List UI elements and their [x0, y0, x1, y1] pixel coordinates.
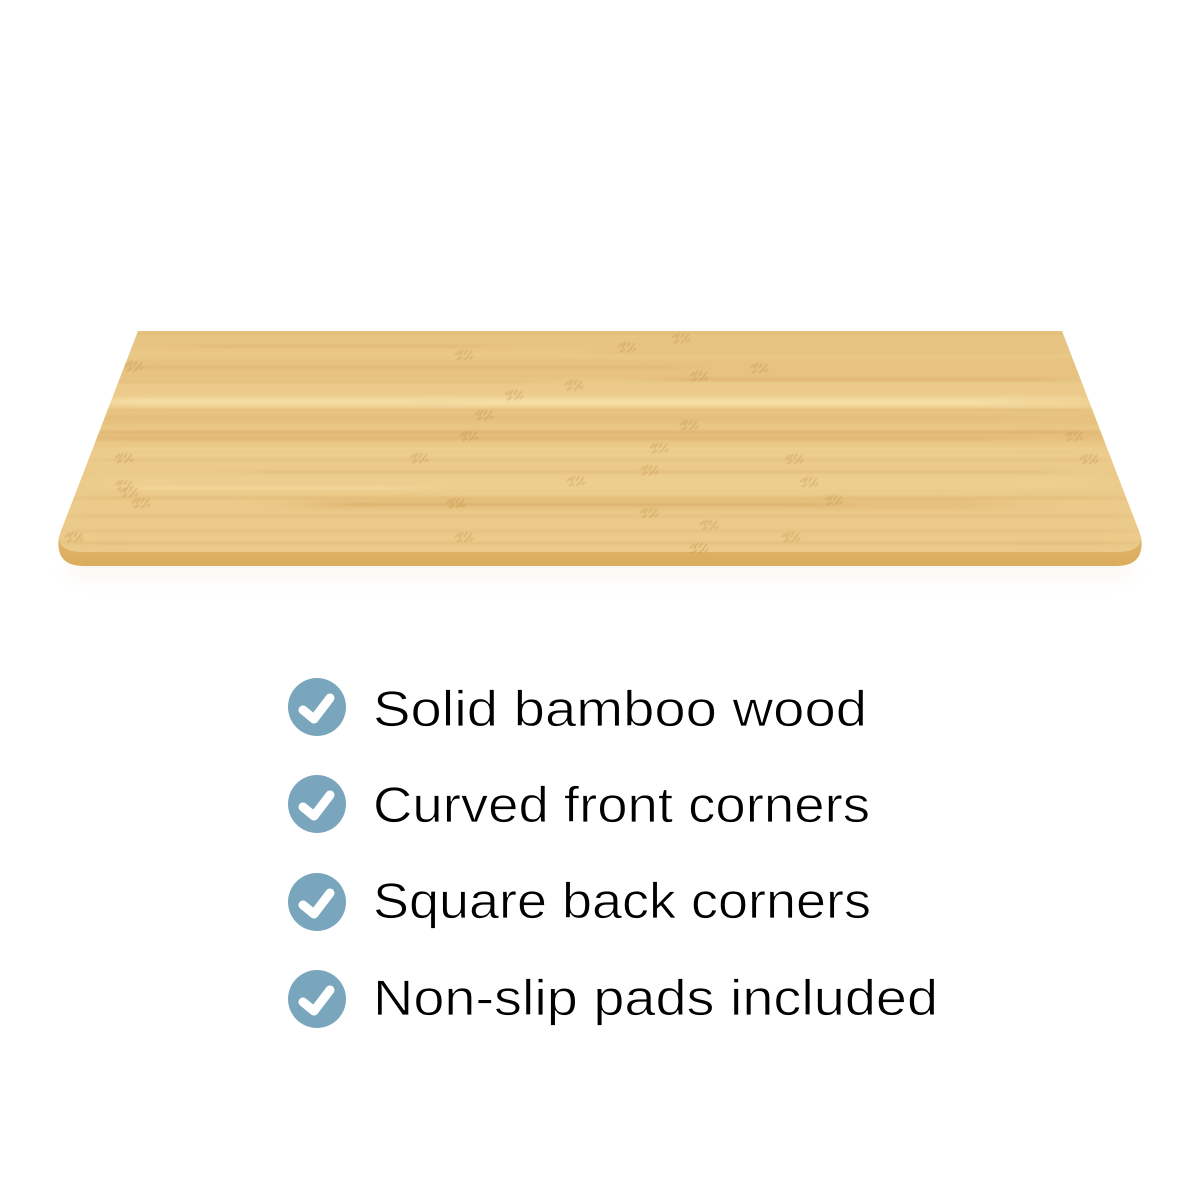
- board front edge: [58, 531, 1142, 566]
- bamboo desktop board: [58, 331, 1142, 576]
- bamboo knots: [65, 333, 1098, 542]
- board top surface with grain: [60, 331, 1140, 552]
- feature list: [288, 678, 938, 1028]
- label: Curved front corners: [373, 777, 870, 833]
- label: Non-slip pads included: [373, 970, 938, 1026]
- icon: check: [288, 970, 346, 1028]
- feature: solid bamboo wood: [288, 678, 867, 737]
- label: Solid bamboo wood: [373, 681, 867, 737]
- icon: check: [288, 873, 346, 931]
- soft shadow under the board: [70, 558, 1130, 576]
- feature: curved front corners: [288, 775, 870, 833]
- icon: check: [288, 678, 346, 736]
- icon: check: [288, 775, 346, 833]
- feature: square back corners: [288, 873, 871, 931]
- feature: non-slip pads included: [288, 970, 938, 1028]
- front edge knot: [690, 543, 708, 553]
- label: Square back corners: [373, 873, 871, 929]
